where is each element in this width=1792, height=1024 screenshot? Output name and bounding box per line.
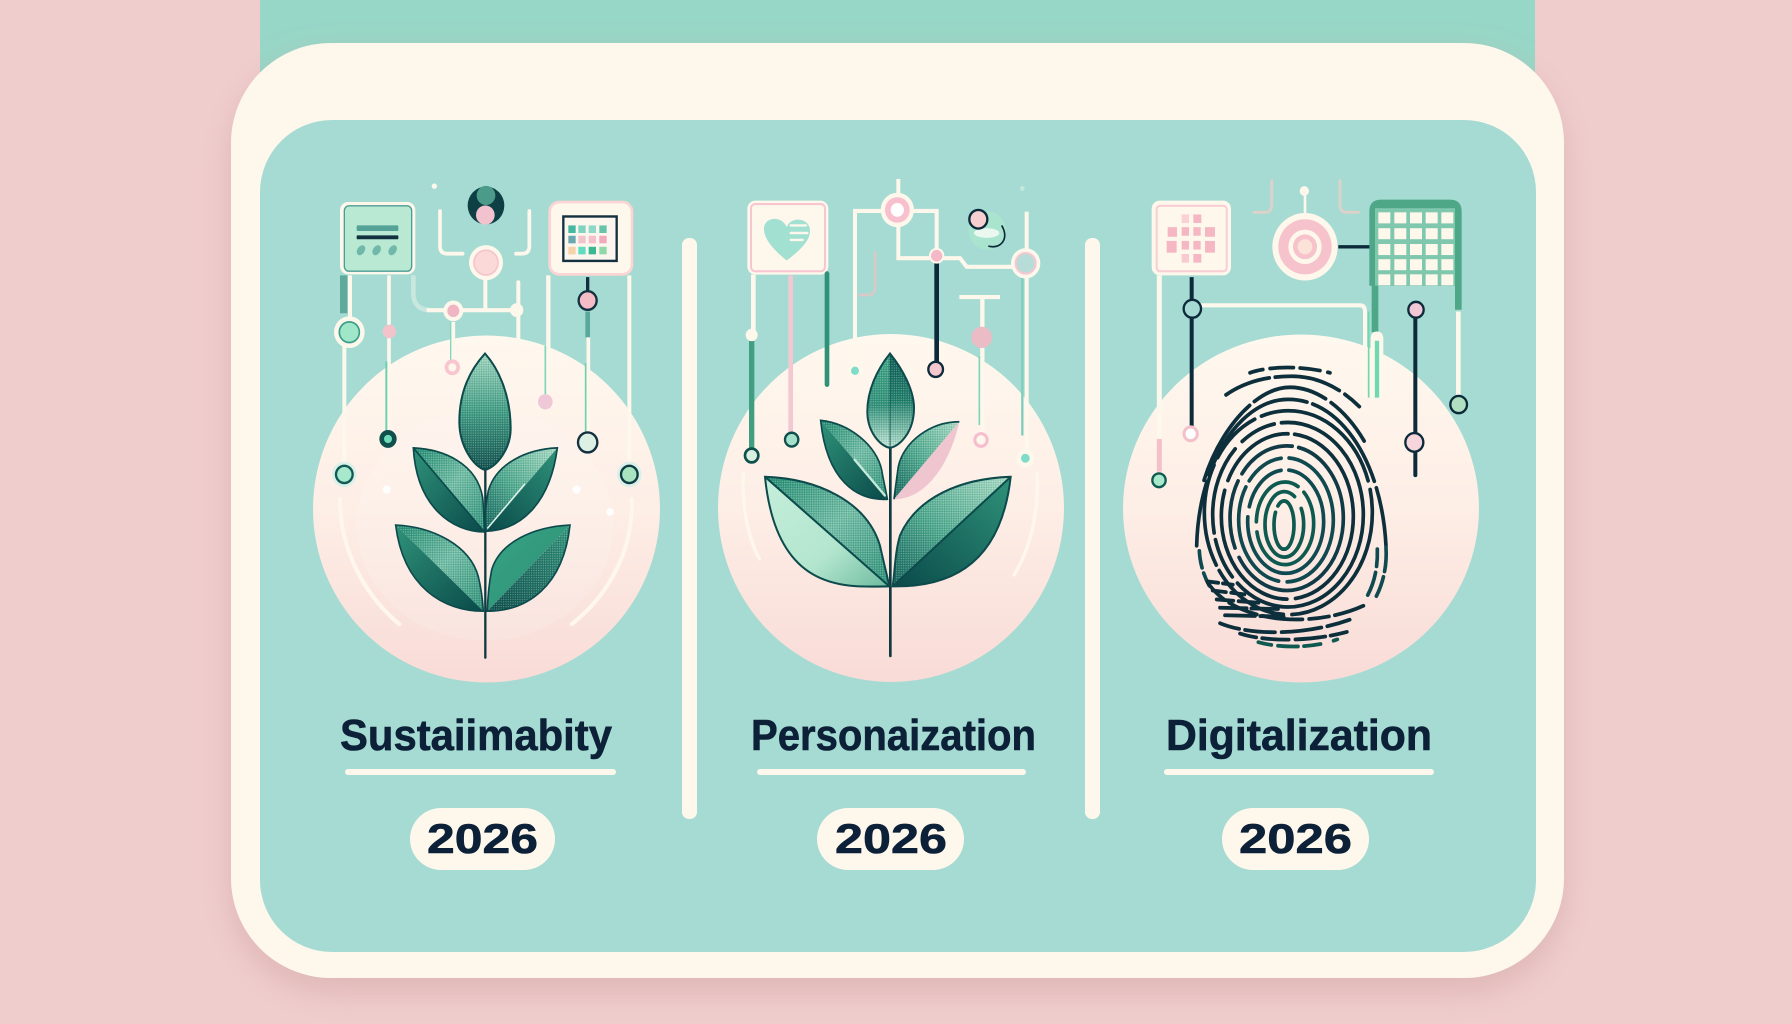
heading: Personaization: Personaization xyxy=(751,711,1036,760)
year pill 1: 2026 xyxy=(427,815,538,862)
network nodes xyxy=(847,193,943,379)
right connector xyxy=(1011,186,1040,468)
year pill 2 xyxy=(817,808,964,870)
connector lines left xyxy=(340,275,431,467)
underline 2 xyxy=(757,769,1026,775)
circuit and fingerprint illustration xyxy=(1152,181,1467,646)
small square dot xyxy=(432,183,437,189)
year pill 2: 2026 xyxy=(835,815,947,862)
year pill 1 xyxy=(410,808,555,870)
pink circle 3 xyxy=(1123,334,1479,682)
circuit and plant illustration 2 xyxy=(743,179,1040,656)
icon: green card xyxy=(340,202,415,274)
divider left xyxy=(682,238,697,819)
circuit and plant illustration 1 xyxy=(332,183,642,658)
icon: cylinder node xyxy=(969,210,1006,250)
pink circle 1 xyxy=(313,336,660,682)
nodes left xyxy=(332,316,397,487)
connector to grid card xyxy=(1338,242,1370,252)
icon: target node xyxy=(1272,186,1338,281)
leaf big right xyxy=(893,477,1011,586)
outer cream frame xyxy=(231,43,1564,978)
heading: Sustaiimabity: Sustaiimabity xyxy=(340,711,612,760)
heading: Digitalization: Digitalization xyxy=(1166,711,1432,760)
leaf lower right xyxy=(487,525,570,611)
pink circle 2 xyxy=(718,334,1064,682)
circuit network centre xyxy=(428,245,523,375)
icon: heart card xyxy=(747,201,828,275)
brackets xyxy=(1254,181,1358,212)
connector lines left xyxy=(1159,275,1365,472)
top teal band xyxy=(260,0,1535,110)
leaf top xyxy=(867,354,914,448)
divider right xyxy=(1085,238,1100,819)
icon: pink chart card xyxy=(550,202,632,274)
leaf upper right xyxy=(485,448,557,531)
underline 3 xyxy=(1164,769,1434,775)
nodes right xyxy=(538,291,642,487)
year pill 3: 2026 xyxy=(1239,815,1352,862)
nodes left xyxy=(1152,300,1201,487)
leaf lower left xyxy=(396,525,483,611)
plant 1 stem xyxy=(482,470,489,658)
leaf top xyxy=(459,354,511,470)
underline 1 xyxy=(345,769,616,775)
leaf upper right xyxy=(894,422,959,499)
panel: personalization xyxy=(718,179,1064,870)
panel: sustainability xyxy=(313,183,660,870)
connector lines right xyxy=(545,275,629,465)
leaf big left xyxy=(765,477,889,587)
circuit network centre xyxy=(855,179,1017,363)
fingerprint xyxy=(1197,368,1386,646)
leaf upper left xyxy=(821,420,887,499)
circle arcs xyxy=(743,473,1037,575)
plant 2 stem xyxy=(886,448,894,656)
nodes left xyxy=(745,329,798,462)
icon: pink pixel card xyxy=(1152,201,1231,275)
leaf upper left xyxy=(413,448,484,532)
icon: top dark node xyxy=(468,186,504,225)
year pill 3 xyxy=(1222,808,1369,870)
panel: digitalization xyxy=(1123,181,1479,870)
teal inner panel xyxy=(260,120,1536,952)
decorative sparkles and arcs xyxy=(340,485,632,624)
T connector xyxy=(959,297,1000,448)
connectors right xyxy=(1369,302,1467,475)
icon: green grid card xyxy=(1369,200,1462,332)
brackets xyxy=(440,211,529,254)
connector lines left xyxy=(752,274,827,449)
